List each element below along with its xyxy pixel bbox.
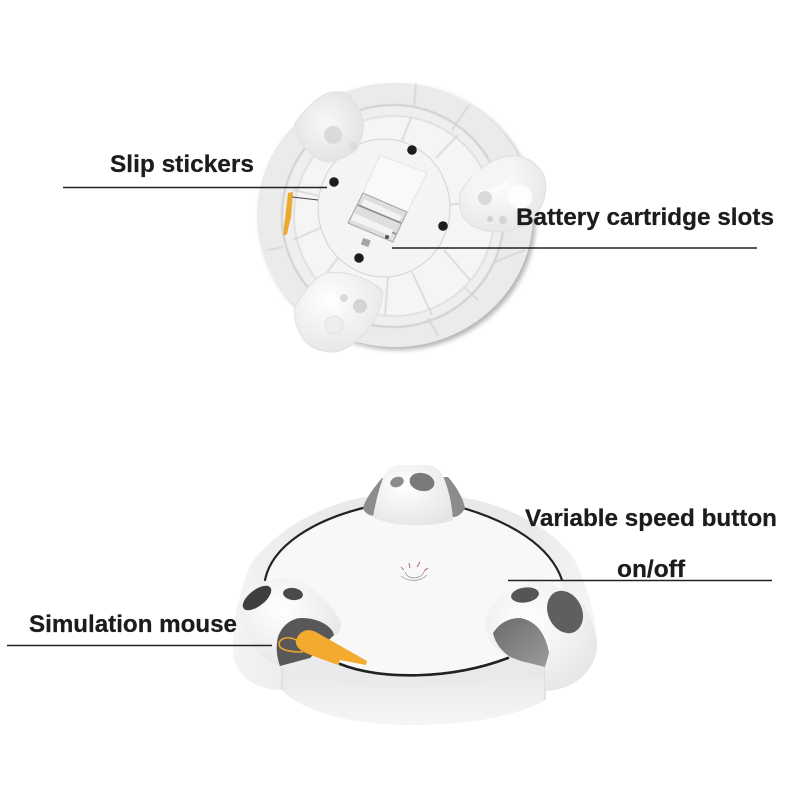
underside ribbed ring <box>268 83 525 336</box>
central battery plate <box>318 139 450 277</box>
smile logo <box>401 562 428 580</box>
left mouse housing <box>239 578 341 667</box>
slip sticker dots <box>329 145 448 263</box>
battery cover <box>363 155 427 212</box>
small part marks on plate <box>385 235 389 239</box>
battery cartridge slots <box>348 193 407 242</box>
black groove ring <box>265 508 562 675</box>
label: slip stickers: Slip stickers <box>110 151 254 178</box>
right mouse housing <box>485 582 597 691</box>
top body silhouette with lobes <box>233 497 597 725</box>
underside outer shell <box>257 83 533 347</box>
product: top view of the toy <box>233 465 597 725</box>
product: underside view of the toy <box>257 83 546 352</box>
mouse housing: bottom left <box>294 272 383 352</box>
base side edges <box>282 665 545 700</box>
back mouse housing <box>363 465 465 525</box>
label: variable speed button on/off <box>508 505 777 583</box>
top body base lip <box>282 665 545 725</box>
top body main dome <box>265 508 563 676</box>
mouse housing: upper left <box>295 92 363 162</box>
icon: orange simulation mouse <box>279 630 367 665</box>
underside drop shadow <box>260 86 536 350</box>
label: variable speed button on/off: on/off <box>617 556 686 583</box>
mouse housing: right <box>459 156 546 232</box>
icon: orange mouse tail <box>283 192 293 236</box>
label: variable speed button on/off: Variable speed button <box>525 505 777 532</box>
label: simulation mouse: Simulation mouse <box>29 611 237 638</box>
label: battery cartridge slots: Battery cartridge slots <box>516 204 774 231</box>
